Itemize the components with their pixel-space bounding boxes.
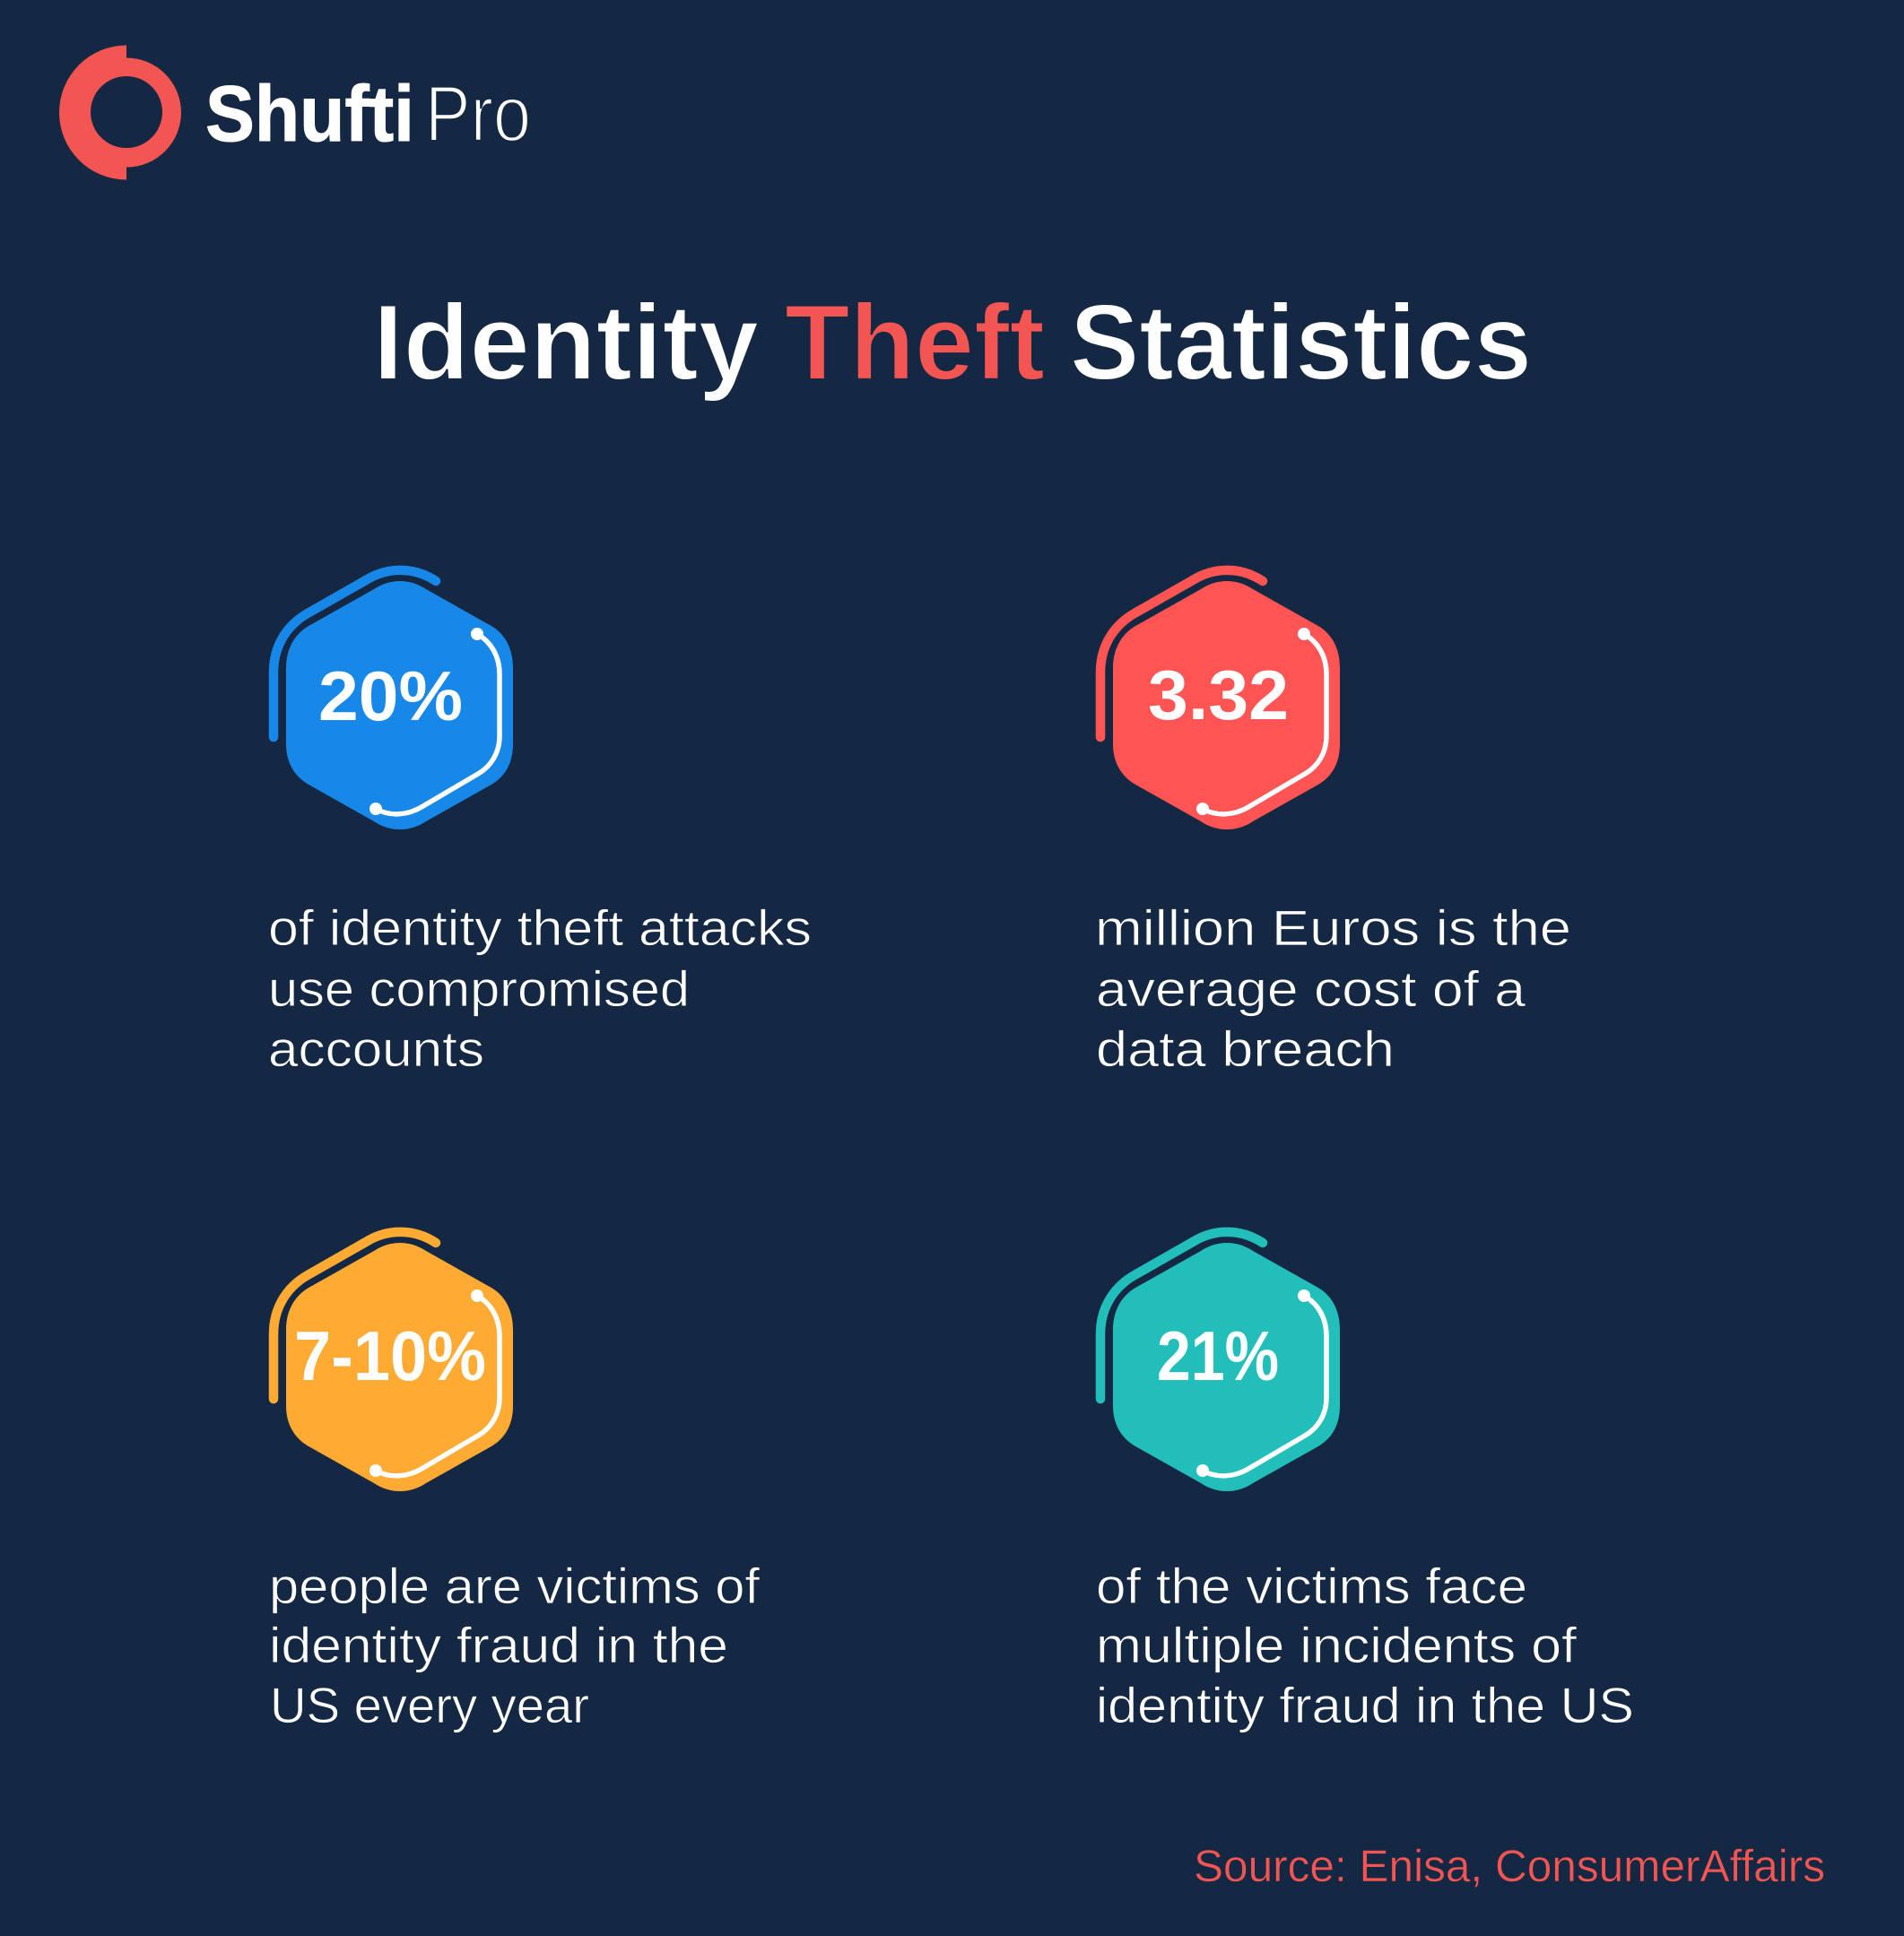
text block: 21% description: of the victims face [1096,1558,1527,1614]
panel: 7-10% stat [269,1232,760,1733]
text block: 7-10% description [269,1558,760,1733]
text block: 3.32 description: million Euros is the [1095,899,1571,956]
text block: 3.32 description [1095,899,1571,1077]
stat value: 7-10%: 7-10% [294,1316,486,1395]
icon: orange hexagon badge [274,1232,513,1491]
text block: 7-10% description: identity fraud in the [269,1617,728,1673]
text block: 20% description: use compromised [268,960,690,1017]
title word: Identity: Identity [373,282,759,403]
icon: red hexagon badge [1100,570,1340,829]
title word: Statistics: Statistics [1070,282,1532,403]
panel: 20% stat [268,570,812,1077]
text block: 20% description [268,899,812,1077]
icon: blue hexagon badge [274,570,513,829]
text block: 7-10% description: US every year [270,1677,589,1733]
text block: 21% description [1096,1558,1634,1733]
panel: 21% stat [1096,1232,1634,1733]
text block: 21% description: multiple incidents of [1096,1617,1577,1673]
text block: 20% description: accounts [268,1020,484,1077]
logo: Shufti Pro [59,45,531,179]
stat value: 3.32: 3.32 [1148,655,1289,734]
logo wordmark: Shufti: Shufti [205,69,414,158]
source note: Source: Enisa, ConsumerAffairs [1194,1841,1825,1891]
stat value: 20%: 20% [318,656,463,735]
text block: 7-10% description: people are victims of [269,1558,760,1614]
title [373,282,1532,403]
text block: 3.32 description: average cost of a [1096,960,1526,1017]
stat value: 21%: 21% [1157,1316,1279,1395]
text block: 20% description: of identity theft attacks [268,899,812,956]
text block: 3.32 description: data breach [1096,1020,1395,1077]
icon: teal hexagon badge [1100,1232,1340,1491]
text block: 21% description: identity fraud in the US [1096,1677,1634,1733]
panel: 3.32 stat [1095,570,1571,1077]
title word: Theft: Theft [785,282,1045,403]
icon: logo ring [59,45,181,179]
logo wordmark: Pro: Pro [425,69,531,158]
